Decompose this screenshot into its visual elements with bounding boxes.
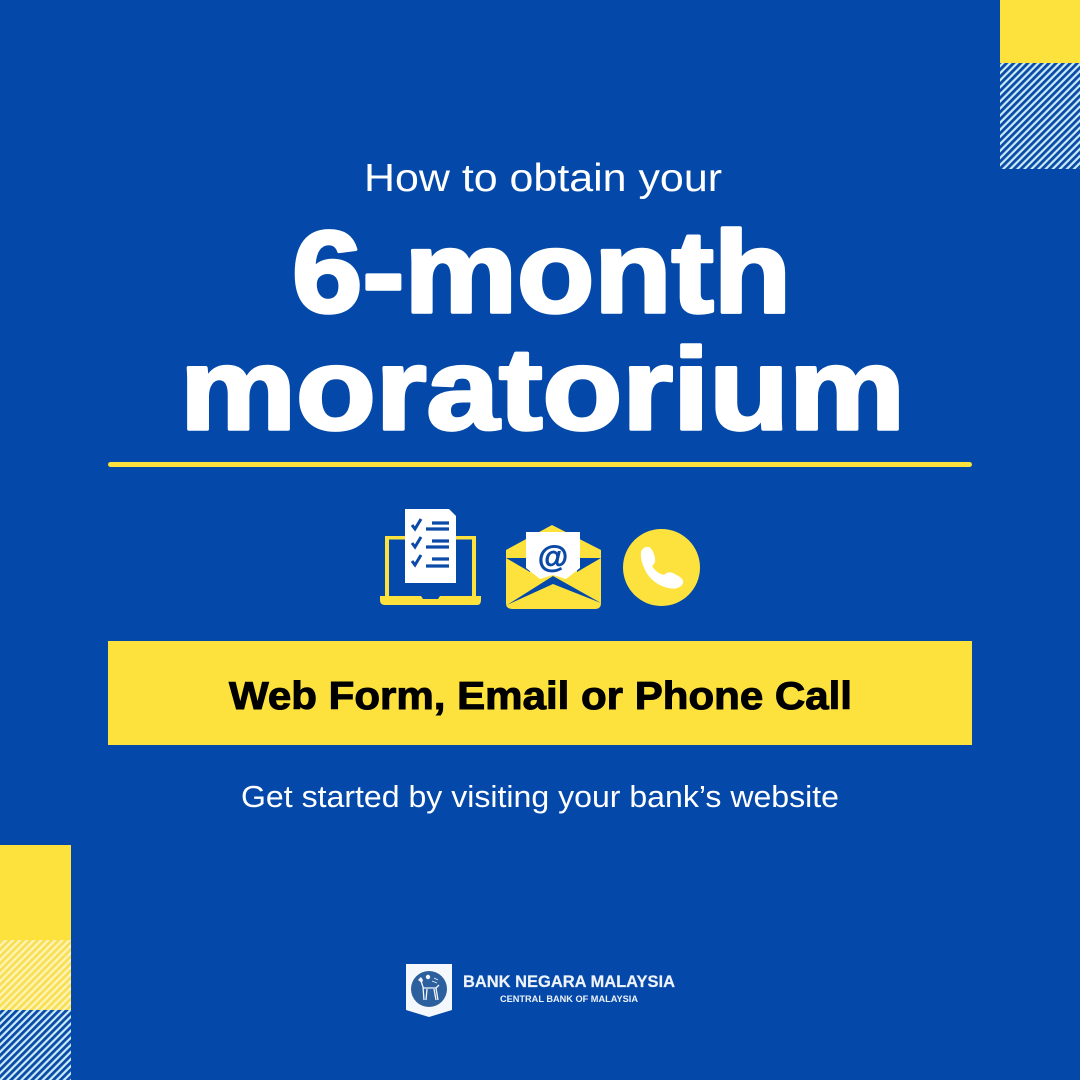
title line 1: 6-month bbox=[292, 207, 791, 337]
banner bbox=[108, 641, 972, 745]
banner text: Web Form, Email or Phone Call bbox=[229, 675, 852, 718]
call to action text: Get started by visiting your bank’s website bbox=[241, 779, 839, 814]
divider line bbox=[108, 462, 972, 467]
logo name: BANK NEGARA MALAYSIA bbox=[463, 973, 675, 991]
decoration: top right corner blocks bbox=[1000, 0, 1080, 169]
icon: phone in circle bbox=[623, 529, 700, 606]
logo: Bank Negara Malaysia bbox=[406, 964, 675, 1017]
title bbox=[180, 207, 905, 454]
subtitle: How to obtain your bbox=[364, 157, 722, 200]
logo shield bbox=[406, 964, 452, 1017]
title line 2: moratorium bbox=[180, 324, 905, 454]
icon: laptop with checklist bbox=[380, 509, 481, 605]
icon: envelope with at sign: @ bbox=[538, 539, 568, 574]
icon: envelope with at sign bbox=[506, 525, 601, 609]
logo tagline: CENTRAL BANK OF MALAYSIA bbox=[500, 994, 638, 1005]
decoration: bottom left corner blocks bbox=[0, 845, 71, 1080]
